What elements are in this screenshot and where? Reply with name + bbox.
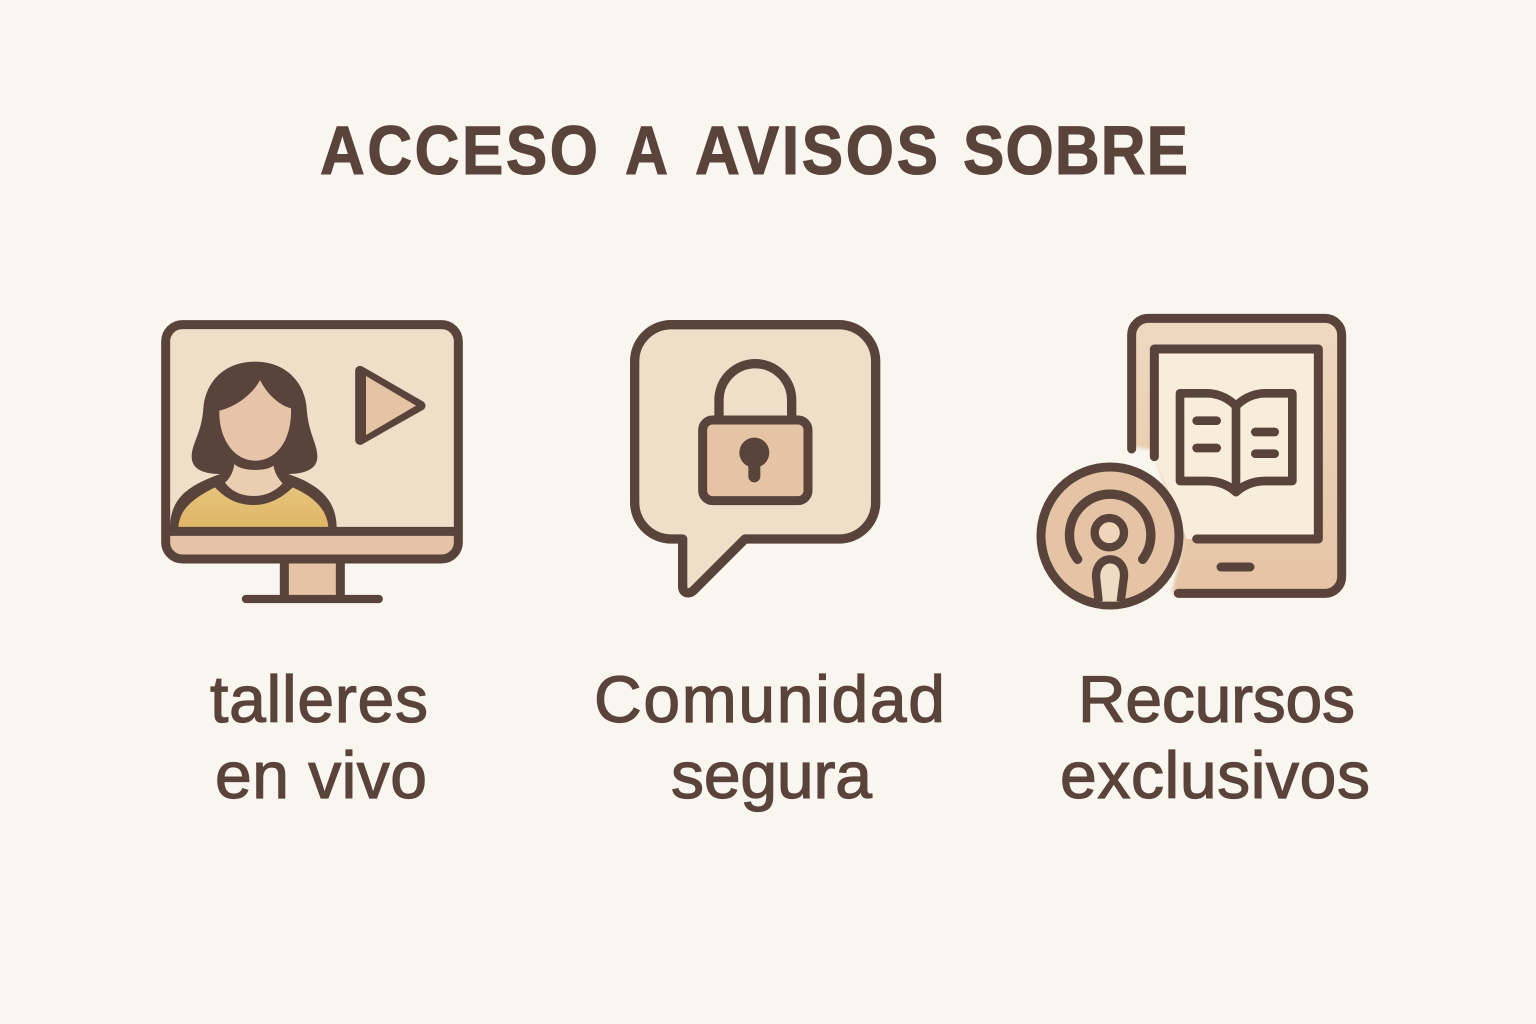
podcast badge <box>1041 467 1179 605</box>
monitor screen <box>166 325 458 559</box>
tablet body <box>1132 318 1342 593</box>
label: Comunidad segura <box>594 662 945 812</box>
label: Comunidad segura: Comunidad <box>594 662 945 736</box>
title: SOBRE <box>963 112 1188 189</box>
title: A <box>625 112 668 189</box>
tablet frame <box>1132 318 1342 593</box>
speech bubble <box>635 325 876 593</box>
monitor stand <box>246 559 379 599</box>
label: talleres en vivo: en vivo <box>215 738 427 812</box>
label: Comunidad segura: segura <box>671 738 872 812</box>
icon: speech bubble with padlock <box>635 325 876 593</box>
padlock shackle <box>719 364 792 420</box>
label: talleres en vivo <box>210 662 428 812</box>
label: talleres en vivo: talleres <box>210 662 428 736</box>
monitor chin <box>166 531 458 559</box>
open book <box>1180 393 1292 492</box>
presenter <box>170 362 337 527</box>
title <box>320 112 1188 189</box>
title: ACCESO <box>320 112 598 189</box>
tablet screen <box>1154 349 1318 539</box>
padlock body <box>703 420 808 501</box>
label: Recursos exclusivos: exclusivos <box>1060 738 1370 812</box>
icon: monitor with video workshop <box>166 325 458 599</box>
label: Recursos exclusivos: Recursos <box>1078 662 1355 736</box>
icon: tablet with book and podcast <box>1041 318 1342 605</box>
keyhole <box>739 438 769 482</box>
play icon <box>360 371 421 440</box>
monitor frame <box>166 325 458 559</box>
title: AVISOS <box>695 112 938 189</box>
label: Recursos exclusivos <box>1060 662 1370 812</box>
